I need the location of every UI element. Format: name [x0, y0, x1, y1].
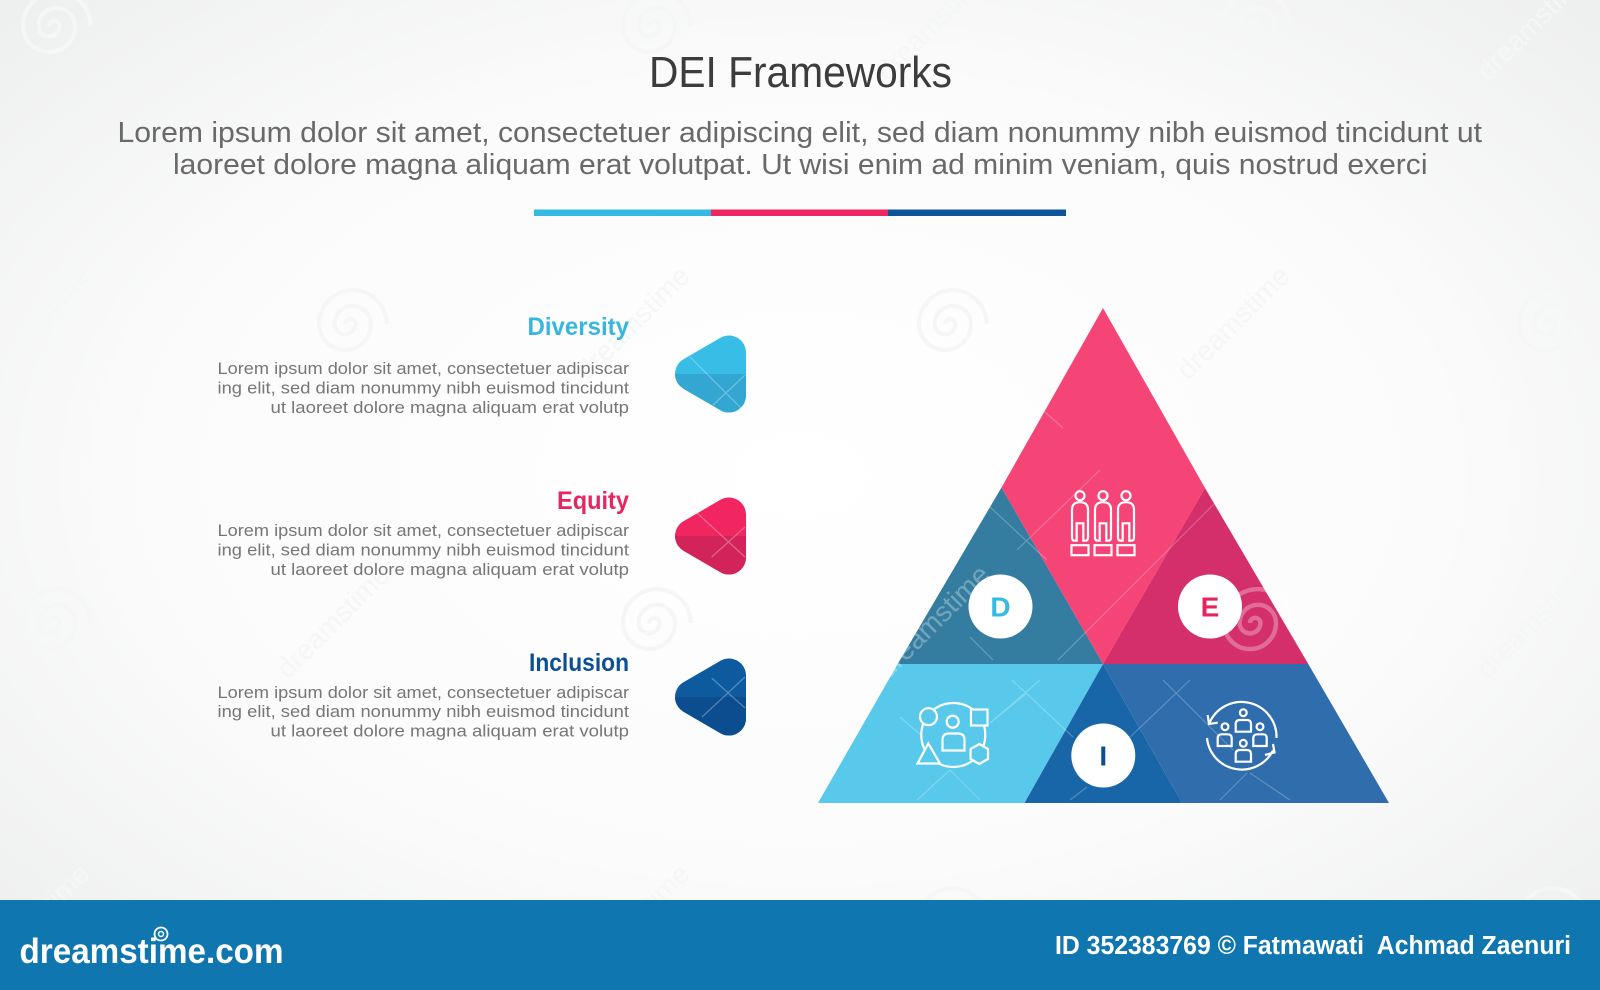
text block: diversity: ing elit, sed diam nonummy nibh euismod tincidunt: [218, 378, 629, 398]
watermark overlay on pyramid: dreamstime: [870, 559, 996, 684]
panel: equity: [218, 487, 745, 579]
icon: pink rounded triangle: [692, 513, 745, 558]
text block: inclusion: ut laoreet dolore magna aliquam erat volutp: [270, 722, 629, 740]
badge: D: D: [990, 592, 1011, 622]
background watermark: dreamstime: [570, 858, 696, 983]
icon: three people: [1072, 491, 1134, 555]
text block: diversity: ut laoreet dolore magna aliquam erat volutp: [270, 398, 629, 417]
text block: diversity: [218, 359, 629, 417]
text block: equity: ut laoreet dolore magna aliquam erat volutp: [270, 560, 629, 579]
icon: diversity shapes around person: [918, 703, 988, 767]
text block: equity: ing elit, sed diam nonummy nibh euismod tincidunt: [218, 540, 629, 560]
panel: inclusion: [218, 649, 745, 740]
segment: mid blue: [1103, 664, 1389, 803]
badge: D: [968, 574, 1032, 638]
text block: inclusion: ing elit, sed diam nonummy nibh euismod tincidunt: [218, 702, 629, 721]
heading: equity: Equity: [557, 487, 629, 515]
badge: I: [1071, 724, 1135, 788]
badge: E: [1178, 574, 1242, 638]
segment: dark blue centre: [1024, 664, 1182, 803]
heading: inclusion: Inclusion: [529, 649, 629, 677]
heading: diversity: Diversity: [528, 313, 629, 341]
text block: inclusion: Lorem ipsum dolor sit amet, consectetuer adipiscar: [218, 683, 629, 702]
text block: equity: [218, 521, 629, 579]
text block: diversity: Lorem ipsum dolor sit amet, consectetuer adipiscar: [218, 359, 629, 378]
segment: dark pink overlap: [1103, 488, 1308, 664]
background watermark: dreamstime: [1170, 858, 1296, 983]
footer logo: dreamstime.com: [20, 932, 284, 971]
badge: I: I: [1099, 740, 1107, 772]
subtitle text block: Lorem ipsum dolor sit amet, consectetuer adipiscing elit, sed diam nonummy nibh euismod tincidunt ut: [118, 117, 1482, 149]
icon: dark blue rounded triangle: [692, 676, 745, 718]
background watermark: dreamstime: [1470, 559, 1596, 684]
subtitle text block: [118, 117, 1482, 181]
badge: E: E: [1201, 592, 1219, 622]
background watermark: dreamstime: [570, 260, 696, 385]
segment: teal overlap: [898, 488, 1103, 664]
background watermark: dreamstime: [270, 559, 396, 684]
footer credit: ID 352383769 © Fatmawati Achmad Zaenuri: [1055, 932, 1571, 960]
panel: diversity: [218, 313, 745, 417]
segment: equity top rhombus: [1002, 308, 1205, 664]
segment: light blue: [818, 664, 1103, 803]
tricolor divider: [534, 210, 1066, 216]
subtitle text block: laoreet dolore magna aliquam erat volutpat. Ut wisi enim ad minim veniam, quis nostrud exerci: [173, 149, 1428, 181]
background watermark: dreamstime: [1170, 260, 1296, 385]
icon: light blue rounded triangle: [690, 352, 745, 410]
chart: DEI pyramid: [818, 308, 1389, 803]
text block: equity: Lorem ipsum dolor sit amet, consectetuer adipiscar: [218, 521, 629, 540]
footer bar: [0, 900, 1600, 990]
text block: inclusion: [218, 683, 629, 740]
icon: inclusion people in cycle: [1207, 702, 1277, 770]
title: DEI Frameworks: [649, 48, 952, 97]
watermark overlay on pyramid: [870, 412, 1292, 800]
